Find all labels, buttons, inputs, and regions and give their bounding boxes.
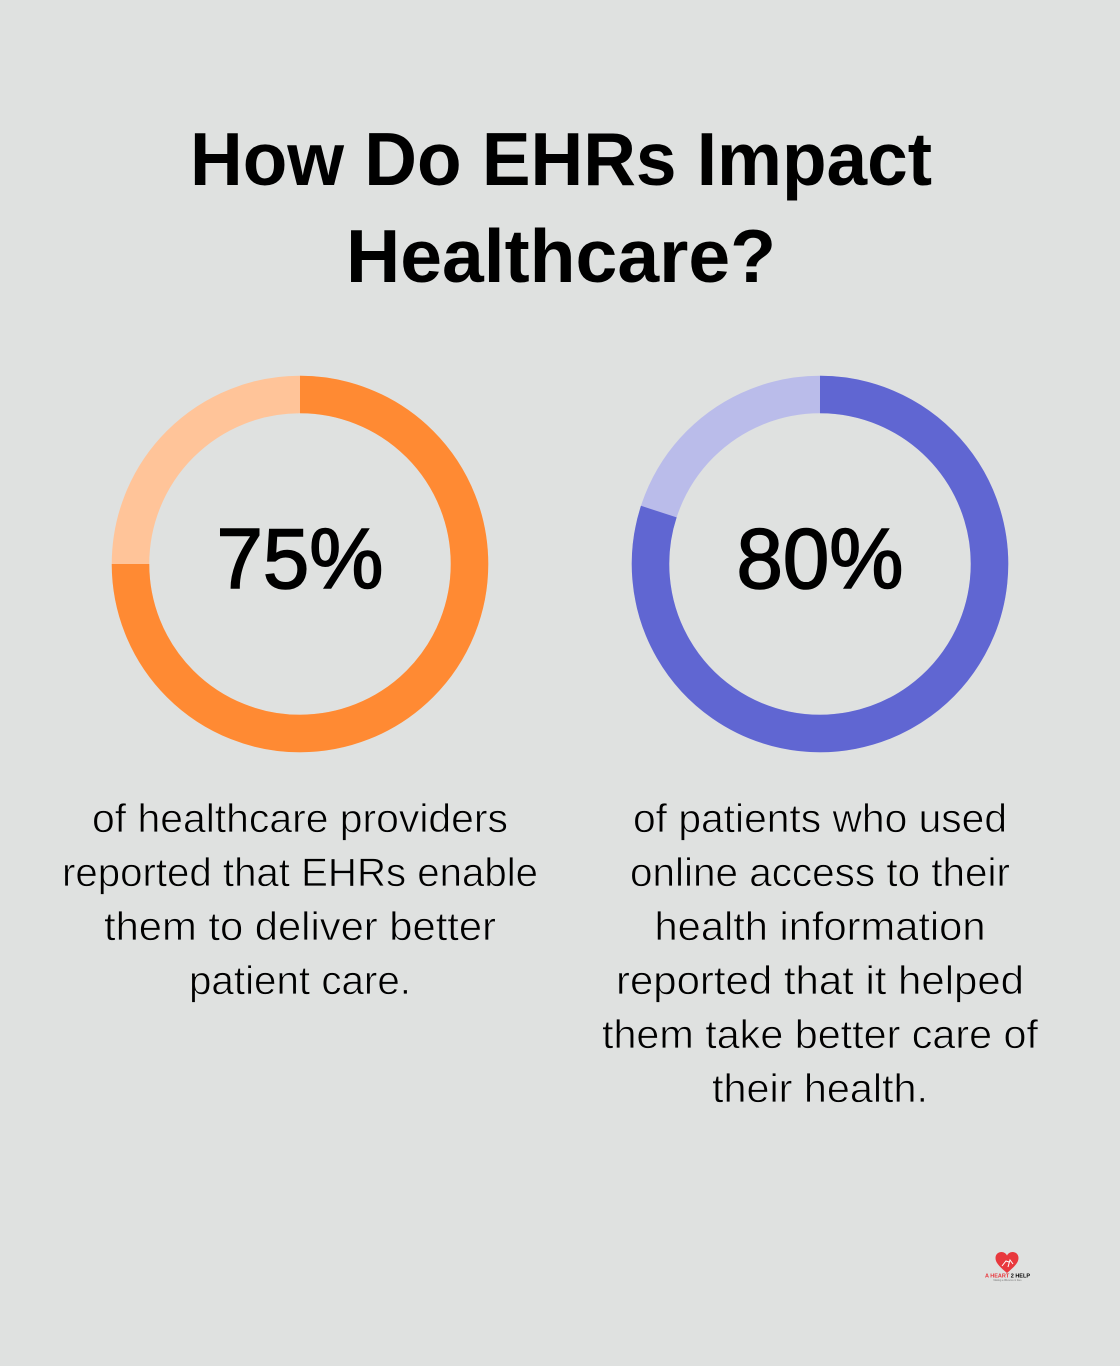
stat value: 75%: 75% [216, 512, 384, 607]
title [190, 117, 932, 298]
description: providers: reported that EHRs enable [62, 851, 538, 895]
donut chart: 75% [130, 394, 470, 734]
description: providers: them to deliver better [104, 905, 496, 949]
logo: A Heart 2 Help [985, 1252, 1030, 1282]
donut chart: 80% [650, 394, 990, 734]
description: patients: of patients who used [633, 797, 1007, 841]
description: patients: them take better care of [602, 1013, 1039, 1057]
description: providers: of healthcare providers [92, 797, 508, 841]
description: patients: their health. [712, 1067, 928, 1111]
logo wordmark: A HEART 2 HELP [985, 1274, 1030, 1280]
logo tagline: Making a difference in lives [994, 1279, 1022, 1282]
stat value: 80%: 80% [736, 512, 904, 607]
icon: heart [996, 1252, 1018, 1273]
description: patients: health information [654, 905, 986, 949]
description: patients: online access to their [630, 851, 1010, 895]
description: patients [602, 797, 1039, 1111]
title: Healthcare? [346, 214, 776, 298]
description: providers: patient care. [189, 959, 411, 1003]
title: How Do EHRs Impact [190, 117, 932, 201]
panel: 80% statistic [602, 394, 1039, 1111]
description: providers [62, 797, 538, 1003]
description: patients: reported that it helped [616, 959, 1024, 1003]
panel: 75% statistic [62, 394, 538, 1003]
